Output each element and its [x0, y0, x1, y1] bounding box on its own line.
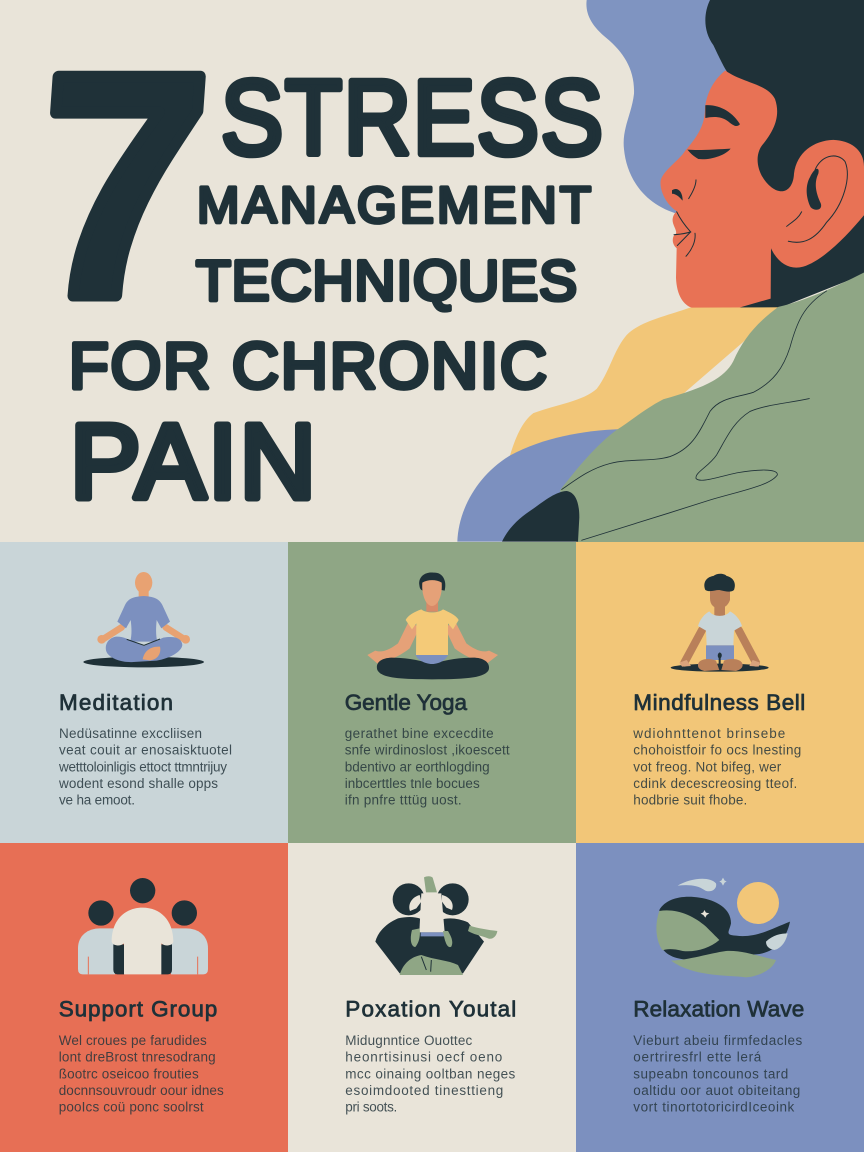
ear inner: [807, 169, 821, 210]
yellow wave: [510, 307, 783, 456]
body text: [58, 726, 232, 808]
body text: veat couit ar enosaisktuotel: [59, 743, 232, 758]
icon: wave and sun: [656, 878, 790, 977]
body text: wdiohnttenot brinsebe: [632, 726, 785, 741]
body text: Vieburt abeiu firmfedacles: [633, 1033, 803, 1048]
icon: meditating figure: [83, 572, 204, 667]
body text: [59, 1033, 224, 1115]
panel: relaxation wave: [576, 843, 864, 1152]
heading: Meditation: [59, 690, 173, 715]
face: [661, 70, 864, 308]
lower blue wave: [457, 429, 620, 542]
body text: bdentivo ar eorthlogding: [345, 759, 490, 774]
body text: Nedüsatinne exccliisen: [59, 726, 202, 741]
body text: heonrtisinusi oecf oeno: [345, 1050, 502, 1065]
heading: Relaxation Wave: [633, 996, 804, 1022]
body text: ve ha emoot.: [59, 793, 135, 808]
icon: seated figure: [671, 574, 769, 672]
body text: Wel croues pe farudides: [59, 1033, 207, 1048]
body text: inbcerttles tnle bocues: [345, 776, 480, 791]
body text: wetttoloinligis ettoct ttmntrijuy: [58, 759, 227, 774]
closed eye: [687, 149, 731, 159]
body text: Midugnntice Ouottec: [345, 1033, 473, 1048]
title: [25, 8, 605, 521]
body text: cdink decescreosing tteof.: [633, 776, 797, 791]
eyebrow: [705, 105, 740, 126]
panel: mindfulness bell: [576, 542, 864, 843]
PAIN: PAIN: [70, 403, 316, 521]
panel: support group: [0, 843, 288, 1152]
upper blue wave: [586, 0, 783, 215]
body text: gerathet bine excecdite: [345, 726, 494, 741]
nostril: [672, 189, 683, 201]
body text: ßootrc oseicoo frouties: [59, 1066, 199, 1081]
body text: supeabn toncounos tard: [633, 1066, 788, 1081]
body text: snfe wirdinoslost ,ikoescett: [345, 743, 510, 758]
heading: Mindfulness Bell: [633, 690, 805, 715]
icon: abstract seated figure: [375, 876, 497, 975]
STRESS: STRESS: [221, 60, 605, 177]
panel: poxation youtal: [288, 843, 576, 1152]
dark hair and neck: [705, 0, 864, 309]
facial contour lines: [674, 156, 847, 256]
body text: ifn pnfre tttüg uost.: [345, 793, 462, 808]
body text: vot freog. Not bifeg, wer: [633, 759, 782, 774]
body text: oaltidu oor auot obiteitang: [633, 1083, 800, 1098]
panel: meditation: [0, 542, 288, 843]
numeral 7: 7: [25, 8, 218, 363]
FOR CHRONIC: FOR CHRONIC: [69, 329, 547, 402]
body text: chohoistfoir fo ocs lnesting: [633, 743, 801, 758]
body text: oertriresfrl ette lerá: [633, 1050, 762, 1065]
shoulder lines: [562, 291, 827, 540]
icon: yoga figure: [367, 572, 498, 679]
body text: [632, 726, 801, 808]
body text: pri soots.: [345, 1100, 397, 1115]
body text: wodent esond shalle opps: [58, 776, 218, 791]
body text: mcc oinaing ooltban neges: [345, 1066, 516, 1081]
body text: pooIcs coü ponc soolrst: [59, 1100, 204, 1115]
body text: [345, 1033, 516, 1115]
body text: vort tinortotoricirdIceoink: [633, 1100, 795, 1115]
body text: docnnsouvroudr oour idnes: [59, 1083, 224, 1098]
body text: [345, 726, 510, 808]
panel: gentle yoga: [288, 542, 576, 843]
TECHNIQUES: TECHNIQUES: [196, 249, 577, 313]
green shoulder: [560, 273, 864, 542]
body text: lont dreBrost tnresodrang: [59, 1050, 216, 1065]
heading: Poxation Youtal: [345, 996, 516, 1022]
heading: Support Group: [59, 996, 217, 1022]
body text: hodbrie suit fhobe.: [633, 793, 747, 808]
icon: three people: [78, 878, 208, 974]
body text: [633, 1033, 803, 1115]
heading: Gentle Yoga: [345, 690, 467, 715]
hero illustration: profile of a calm face: [457, 0, 864, 542]
body text: esoimdooted tinesttieng: [345, 1083, 503, 1098]
MANAGEMENT: MANAGEMENT: [197, 176, 591, 234]
dark collar: [502, 491, 579, 542]
